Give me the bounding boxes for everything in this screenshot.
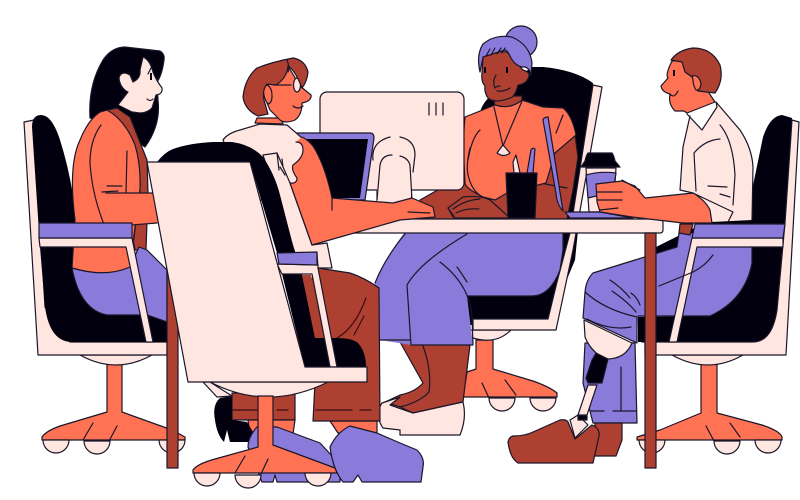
- man with glasses: legs and shoes: [214, 268, 423, 482]
- head: [482, 52, 529, 101]
- neck and face: [118, 57, 162, 113]
- shirt: [680, 102, 753, 222]
- man 4 chair: [637, 115, 799, 454]
- hair: [479, 36, 532, 75]
- arms: [420, 130, 578, 219]
- man with glasses: arm and hand: [290, 137, 435, 245]
- belt: [679, 224, 693, 235]
- trousers: [300, 268, 380, 421]
- back chair: [463, 67, 602, 411]
- neck: [255, 118, 283, 124]
- forearm: [106, 193, 160, 227]
- woman with purple hair: upper body: [420, 26, 578, 219]
- pen cup: [506, 148, 537, 218]
- arm and hand: [596, 181, 712, 223]
- left hand: [448, 196, 510, 218]
- coffee cup: [581, 153, 620, 212]
- man 4 legs: [508, 233, 752, 463]
- neck: [493, 96, 522, 108]
- black back: [157, 142, 295, 253]
- trousers: [374, 232, 563, 345]
- neck and head: [661, 60, 715, 113]
- back shoe: [595, 423, 622, 456]
- woman with purple hair: legs: [374, 232, 563, 435]
- front chair: [147, 142, 367, 488]
- table leg left: [167, 270, 178, 468]
- prosthetic leg: [584, 320, 632, 359]
- pants: [72, 247, 167, 322]
- necklace pendant: [497, 145, 510, 156]
- front shoe: [508, 420, 599, 463]
- bun: [505, 26, 537, 58]
- table top: [320, 219, 663, 233]
- lower legs: [385, 342, 470, 413]
- shoe: [378, 397, 464, 435]
- thigh: [583, 233, 752, 343]
- base: [203, 382, 328, 397]
- purple shoes: [248, 427, 340, 482]
- hair: [90, 47, 164, 147]
- head: [264, 66, 311, 122]
- hair: [243, 58, 308, 116]
- woman with long black hair: [72, 47, 167, 322]
- man 4 chair arm: [659, 224, 785, 342]
- near leg: [330, 421, 377, 433]
- table leg right: [645, 233, 656, 468]
- far leg: [232, 393, 295, 420]
- frame: [263, 153, 332, 268]
- dark laptop: [295, 133, 374, 200]
- orange top: [463, 100, 576, 200]
- shirt: [223, 124, 320, 200]
- torso: [107, 108, 148, 250]
- man with glasses: head and shirt: [223, 58, 320, 200]
- hair: [671, 48, 721, 93]
- silver laptop: [543, 117, 633, 218]
- back trouser leg: [583, 343, 637, 423]
- monitor: [320, 92, 464, 220]
- necklace: [494, 101, 522, 146]
- left chair arm: [39, 223, 153, 342]
- band and strut: [277, 264, 337, 367]
- man 4 upper body: [596, 48, 753, 235]
- left chair: [24, 115, 185, 454]
- black shoe: [214, 396, 253, 442]
